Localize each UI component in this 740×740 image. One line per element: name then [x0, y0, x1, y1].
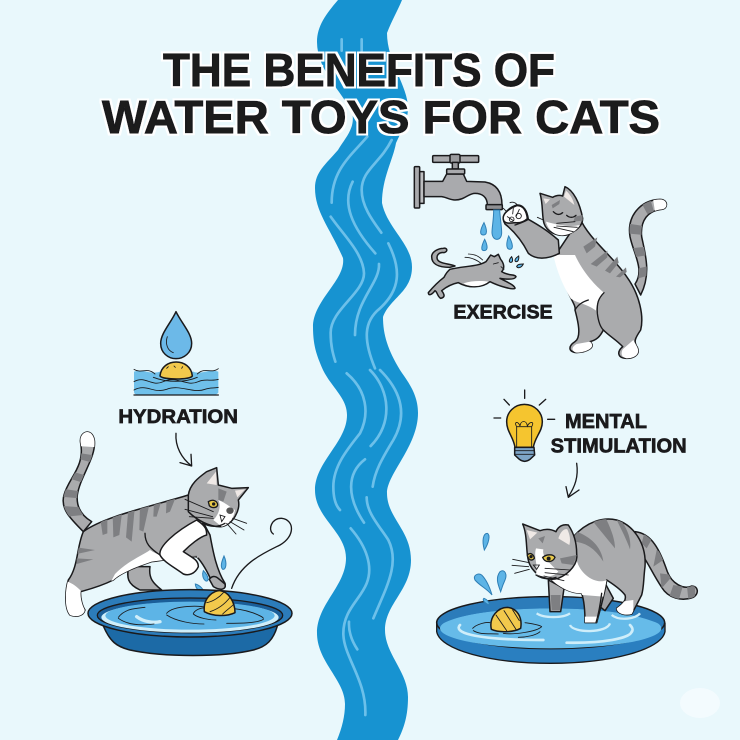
big cat reaching for water: [503, 187, 670, 358]
label: mental stimulation: [551, 411, 687, 458]
river streaks lower: [333, 370, 401, 715]
watermark sparkle: [680, 688, 720, 718]
panel: mental stimulation: [494, 390, 687, 497]
small running cat: [428, 248, 516, 298]
arrow: [176, 433, 192, 466]
label: hydration: HYDRATION: [118, 407, 238, 428]
pool: [437, 597, 665, 663]
label: mental stimulation: MENTAL: [565, 411, 647, 433]
cat at bowl: [60, 427, 248, 620]
title: WATER TOYS FOR CATS: [102, 91, 660, 143]
toy wand: [232, 518, 291, 588]
scene: mental stimulation cat in pool: [437, 517, 697, 663]
bowl with water: [88, 590, 292, 655]
label: exercise: EXERCISE: [453, 302, 553, 323]
panel: exercise: [414, 154, 670, 358]
title: THE BENEFITS OF: [163, 44, 555, 96]
icon: water stream and drops: [481, 210, 523, 268]
label: mental stimulation: STIMULATION: [551, 436, 687, 458]
scene: hydration cat with bowl: [60, 427, 292, 655]
toy ball: [204, 576, 235, 616]
toy ball: [491, 607, 521, 632]
title: [102, 44, 660, 143]
arrow: [566, 463, 579, 497]
panel: hydration: [118, 312, 238, 428]
icon: light bulb: [494, 390, 555, 461]
icon: faucet: [414, 154, 502, 210]
icon: water drop and toy: [134, 312, 218, 395]
cat standing in pool: [474, 517, 697, 625]
river streaks upper: [331, 39, 397, 368]
river: [313, 0, 418, 740]
